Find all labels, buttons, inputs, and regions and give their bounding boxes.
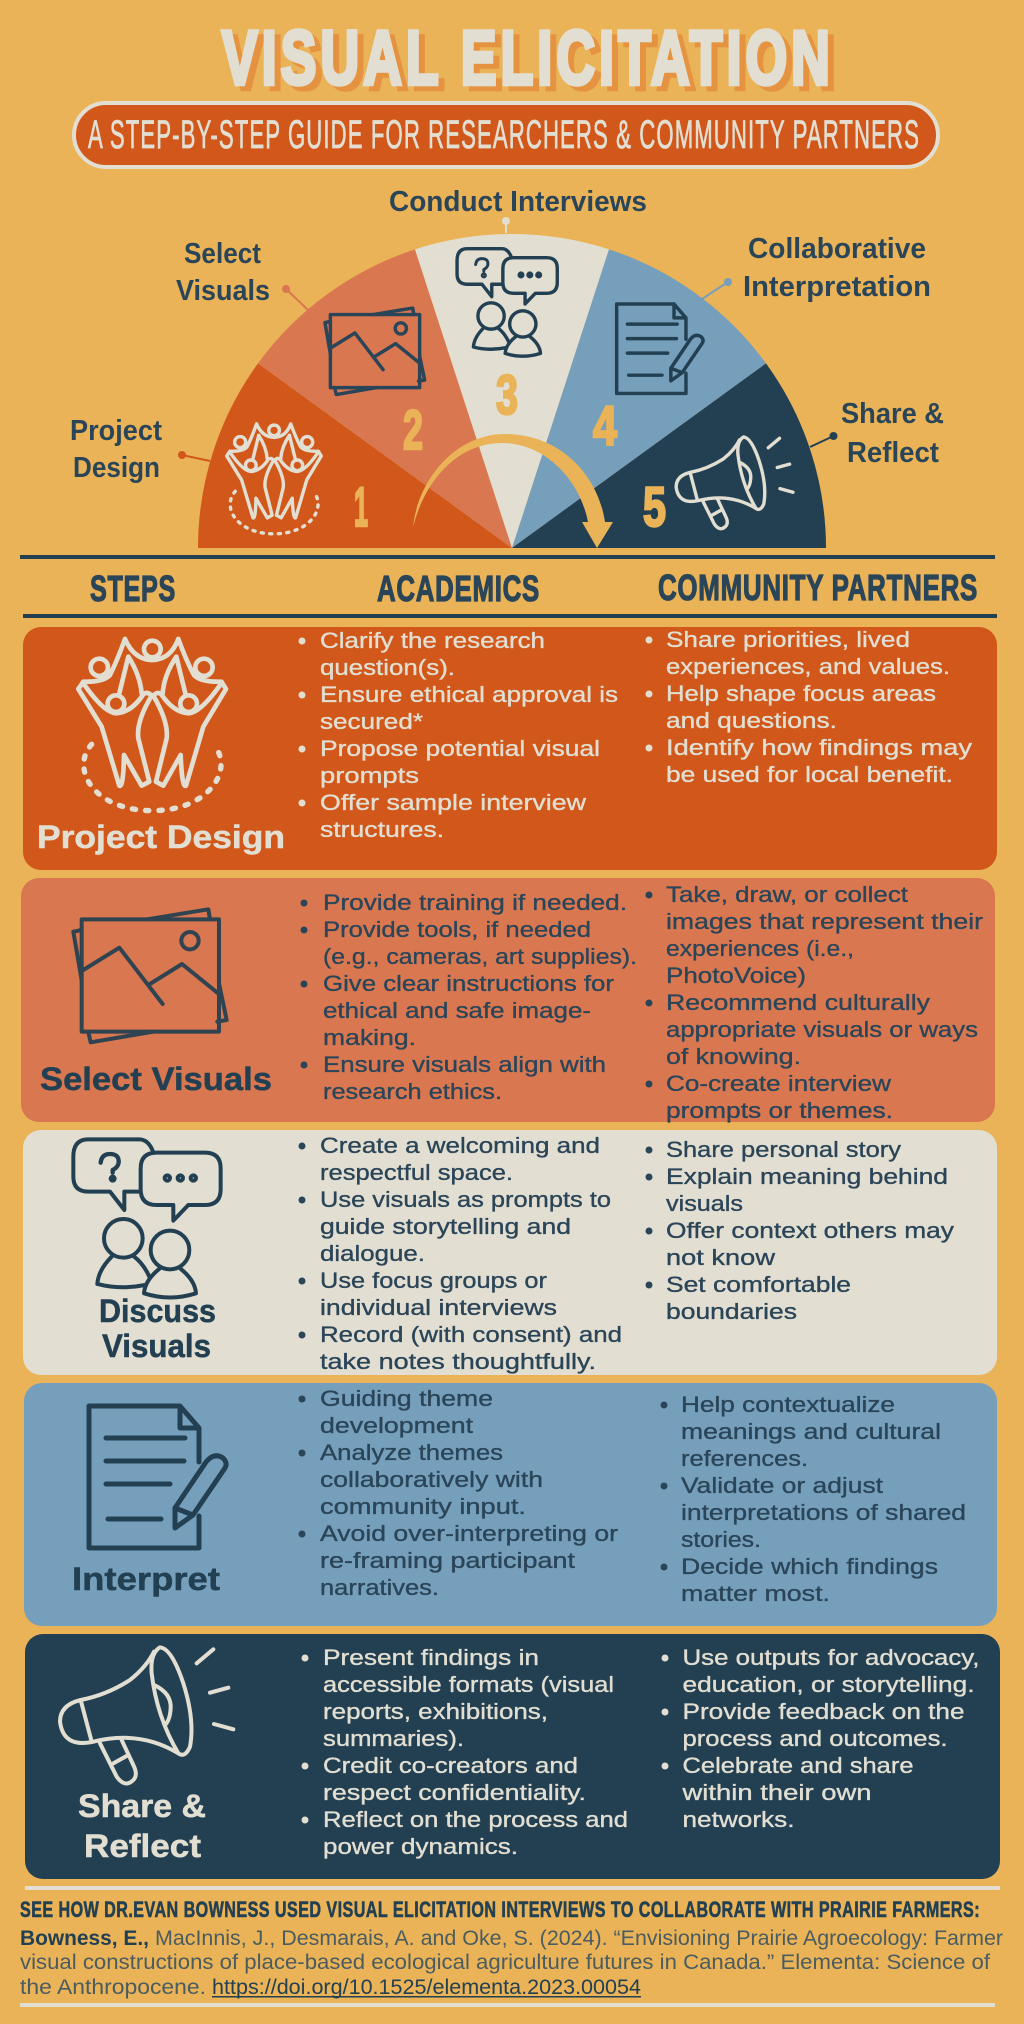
- academics list: Propose potential visual: [320, 736, 600, 761]
- community partners list: Validate or adjust: [681, 1473, 884, 1498]
- icon: people circle: [227, 424, 321, 534]
- community partners list: [646, 1137, 955, 1324]
- citation: https://doi.org/10.1525/elementa.2023.00054: [212, 1976, 641, 1999]
- label: project design: Project: [70, 415, 162, 447]
- community partners list: be used for local benefit.: [666, 762, 953, 787]
- academics list: development: [320, 1413, 474, 1438]
- community partners list: process and outcomes.: [682, 1726, 948, 1751]
- step name: [78, 1788, 206, 1864]
- academics list: summaries).: [323, 1726, 464, 1751]
- label: collaborative interpretation: [702, 233, 931, 303]
- community partners list: Share priorities, lived: [666, 627, 910, 652]
- label: select visuals: [176, 238, 308, 310]
- community partners list: Recommend culturally: [666, 990, 931, 1015]
- academics list: take notes thoughtfully.: [320, 1349, 596, 1374]
- academics list: respect confidentiality.: [323, 1780, 586, 1805]
- label: conduct interviews: Conduct Interviews: [389, 186, 647, 218]
- icon: megaphone: [60, 1647, 233, 1783]
- wedge 5: share and reflect: [512, 363, 826, 548]
- academics list: Present findings in: [323, 1645, 539, 1670]
- academics list: guide storytelling and: [320, 1214, 571, 1239]
- community partners list: education, or storytelling.: [682, 1672, 974, 1697]
- citation: the Anthropocene.: [20, 1976, 206, 1999]
- icon: document and pencil: [89, 1406, 226, 1548]
- number 4: 4: [593, 394, 617, 457]
- community partners list: of knowing.: [666, 1044, 801, 1069]
- academics list: narratives.: [320, 1575, 439, 1600]
- icon: people circle: [78, 639, 226, 811]
- community partners list: prompts or themes.: [666, 1098, 893, 1123]
- label: project design: [70, 415, 210, 484]
- community partners list: meanings and cultural: [681, 1419, 941, 1444]
- academics list: Guiding theme: [320, 1386, 493, 1411]
- step name: [99, 1293, 216, 1364]
- icon: megaphone: [676, 437, 793, 529]
- community partners list: Use outputs for advocacy,: [682, 1645, 980, 1670]
- academics list: accessible formats (visual: [323, 1672, 614, 1697]
- community partners list: Help contextualize: [681, 1392, 895, 1417]
- academics list: [301, 890, 637, 1104]
- community partners list: and questions.: [666, 708, 837, 733]
- academics list: respectful space.: [320, 1160, 513, 1185]
- community partners list: Share personal story: [666, 1137, 902, 1162]
- community partners list: references.: [681, 1446, 808, 1471]
- step name: Project Design: [37, 819, 285, 855]
- academics list: dialogue.: [320, 1241, 425, 1266]
- community partners list: PhotoVoice): [666, 963, 806, 988]
- academics list: Credit co-creators and: [323, 1753, 578, 1778]
- icon: images: [73, 909, 227, 1042]
- community partners list: [661, 1392, 966, 1606]
- wedge 2: select visuals: [258, 249, 512, 548]
- panel: select visuals: [21, 878, 995, 1123]
- academics list: Clarify the research: [320, 628, 545, 653]
- header: academics: ACADEMICS: [377, 568, 540, 609]
- citation: Bowness, E.,: [20, 1927, 149, 1950]
- academics list: [299, 1386, 619, 1600]
- icon: speech and people: [73, 1139, 221, 1297]
- academics list: Ensure visuals align with: [323, 1052, 606, 1077]
- community partners list: visuals: [666, 1191, 743, 1216]
- label: collaborative interpretation: Collaborative: [748, 233, 926, 265]
- step name: Reflect: [84, 1828, 201, 1864]
- community partners list: Identify how findings may: [666, 735, 973, 760]
- icon: images: [325, 308, 425, 395]
- community partners list: Explain meaning behind: [666, 1164, 948, 1189]
- label: conduct interviews: [389, 186, 647, 233]
- step name: Visuals: [102, 1328, 211, 1364]
- community partners list: Co-create interview: [666, 1071, 892, 1096]
- number 3: 3: [496, 363, 518, 426]
- academics list: Analyze themes: [320, 1440, 503, 1465]
- label: share and reflect: Reflect: [847, 437, 939, 469]
- community partners list: matter most.: [681, 1581, 830, 1606]
- community partners list: networks.: [682, 1807, 794, 1832]
- community partners list: experiences, and values.: [666, 654, 950, 679]
- academics list: Provide training if needed.: [323, 890, 627, 915]
- community partners list: Set comfortable: [666, 1272, 851, 1297]
- community partners list: Celebrate and share: [682, 1753, 914, 1778]
- community partners list: Take, draw, or collect: [666, 882, 909, 907]
- header: steps: STEPS: [90, 568, 176, 609]
- community partners list: experiences (i.e.,: [666, 936, 854, 961]
- panel: interpret: [24, 1383, 997, 1626]
- citation: [20, 1927, 1003, 1999]
- academics list: power dynamics.: [323, 1834, 518, 1859]
- community partners list: [646, 882, 984, 1123]
- panel: project design: [23, 627, 997, 870]
- community partners list: not know: [666, 1245, 776, 1270]
- academics list: re-framing participant: [320, 1548, 576, 1573]
- step name: Select Visuals: [40, 1061, 272, 1097]
- academics list: Use visuals as prompts to: [320, 1187, 611, 1212]
- academics list: question(s).: [320, 655, 455, 680]
- academics list: collaboratively with: [320, 1467, 543, 1492]
- academics list: Record (with consent) and: [320, 1322, 622, 1347]
- community partners list: Offer context others may: [666, 1218, 955, 1243]
- step name: Discuss: [99, 1293, 216, 1329]
- academics list: secured*: [320, 709, 423, 734]
- icon: document and pencil: [617, 304, 703, 393]
- academics list: Use focus groups or: [320, 1268, 548, 1293]
- academics list: Ensure ethical approval is: [320, 682, 618, 707]
- academics list: research ethics.: [323, 1079, 502, 1104]
- wedge 1: project design: [198, 363, 512, 548]
- arrow: [413, 434, 613, 548]
- semicircle process diagram: 1: [354, 475, 368, 538]
- label: share and reflect: Share &: [841, 398, 944, 430]
- academics list: [299, 628, 618, 842]
- community partners list: images that represent their: [666, 909, 984, 934]
- number 5: 5: [643, 475, 666, 538]
- label: project design: Design: [73, 452, 160, 484]
- number 2: 2: [403, 398, 423, 461]
- academics list: ethical and safe image-: [323, 998, 591, 1023]
- academics list: prompts: [320, 763, 419, 788]
- citation: visual constructions of place-based ecological agriculture futures in Canada.” Elementa: Science of: [20, 1951, 990, 1974]
- academics list: Create a welcoming and: [320, 1133, 600, 1158]
- community partners list: Provide feedback on the: [682, 1699, 964, 1724]
- label: select visuals: Select: [184, 238, 261, 270]
- community partners list: [646, 627, 973, 787]
- community partners list: appropriate visuals or ways: [666, 1017, 978, 1042]
- academics list: Reflect on the process and: [323, 1807, 628, 1832]
- community partners list: [662, 1645, 980, 1832]
- academics list: Offer sample interview: [320, 790, 587, 815]
- community partners list: Decide which findings: [681, 1554, 938, 1579]
- academics list: (e.g., cameras, art supplies).: [323, 944, 637, 969]
- academics list: community input.: [320, 1494, 526, 1519]
- label: collaborative interpretation: Interpretation: [743, 271, 931, 303]
- community partners list: stories.: [681, 1527, 761, 1552]
- panel: discuss visuals: [23, 1130, 997, 1375]
- community partners list: interpretations of shared: [681, 1500, 966, 1525]
- wedge 3: conduct interviews: [415, 234, 609, 548]
- icon: speech and people: [457, 249, 557, 356]
- step name: Share &: [78, 1788, 206, 1824]
- academics list: reports, exhibitions,: [323, 1699, 548, 1724]
- academics list: making.: [323, 1025, 416, 1050]
- subtitle pill: [74, 103, 938, 167]
- academics list: Avoid over-interpreting or: [320, 1521, 619, 1546]
- step name: Interpret: [72, 1561, 220, 1597]
- panel: share and reflect: [25, 1634, 1000, 1879]
- community partners list: boundaries: [666, 1299, 797, 1324]
- academics list: Provide tools, if needed: [323, 917, 591, 942]
- semicircle process diagram: [70, 186, 944, 548]
- community partners list: Help shape focus areas: [666, 681, 936, 706]
- academics list: [299, 1133, 622, 1374]
- academics list: [302, 1645, 628, 1859]
- wedge 4: collaborative interpretation: [512, 249, 766, 548]
- community partners list: within their own: [681, 1780, 872, 1805]
- academics list: individual interviews: [320, 1295, 557, 1320]
- academics list: Give clear instructions for: [323, 971, 615, 996]
- column headers: [90, 567, 978, 609]
- label: select visuals: Visuals: [176, 275, 270, 307]
- label: share and reflect: [810, 398, 944, 469]
- citation: MacInnis, J., Desmarais, A. and Oke, S. (2024). “Envisioning Prairie Agroecology: Farmer: [155, 1927, 1003, 1950]
- academics list: structures.: [320, 817, 444, 842]
